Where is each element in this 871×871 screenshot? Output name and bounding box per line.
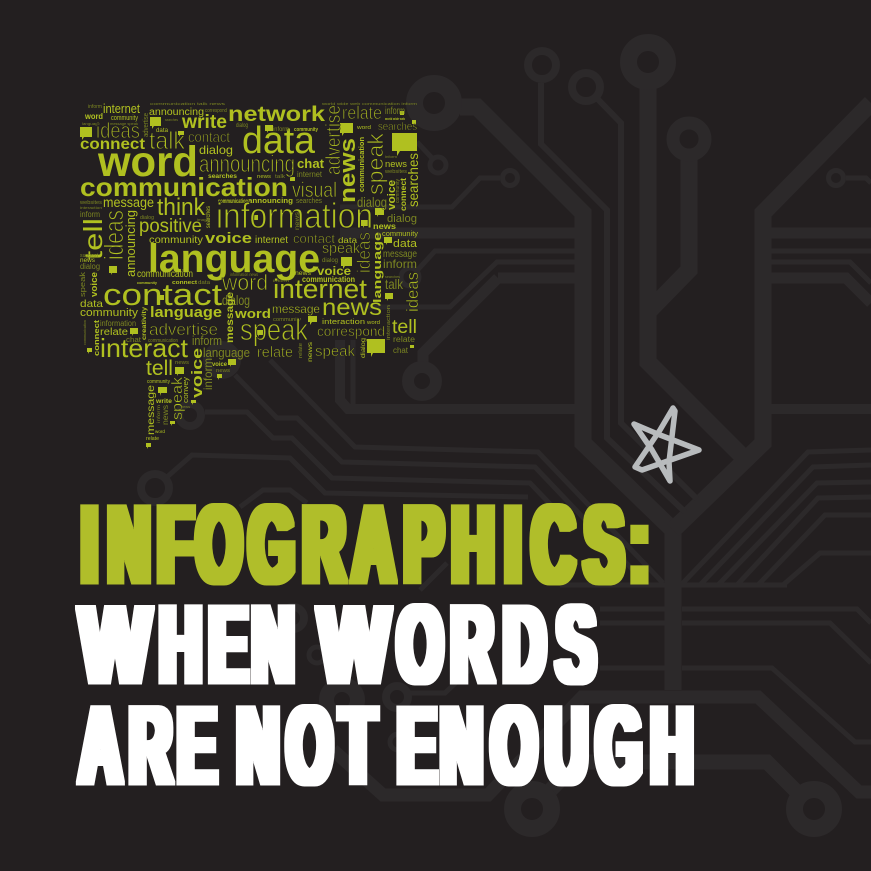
- speech-bubble word cloud: news: [322, 294, 382, 320]
- title line 1: Infographics: INFOGRAPHICS:: [81, 483, 649, 606]
- speech-bubble word cloud: inform: [383, 257, 417, 271]
- speech-bubble word cloud: news: [181, 404, 190, 409]
- speech-bubble word cloud: searches: [385, 274, 400, 279]
- speech-bubble word cloud: voice: [189, 348, 206, 398]
- speech-bubble word cloud: contact: [293, 231, 335, 246]
- speech-bubble word cloud: dialog: [80, 262, 100, 271]
- speech-bubble word cloud: write: [181, 112, 227, 133]
- speech-bubble word cloud: inform: [192, 333, 222, 348]
- speech-bubble word cloud: image: [197, 217, 210, 222]
- speech-bubble word cloud: dialog: [140, 215, 154, 221]
- speech-bubble word cloud: news: [175, 360, 190, 366]
- speech-bubble word cloud: news: [257, 174, 272, 180]
- speech-bubble word cloud: information: [100, 319, 136, 328]
- speech-bubble word cloud: community: [80, 307, 139, 319]
- speech-bubble word cloud: message: [272, 302, 320, 316]
- title line 3: Are not enough: ARE NOT ENOUGH: [79, 683, 693, 807]
- speech-bubble word cloud: dialog: [322, 258, 338, 264]
- speech-bubble word cloud: chat: [393, 346, 409, 355]
- speech-bubble word cloud: speak: [322, 240, 360, 257]
- speech-bubble word cloud: community: [294, 127, 318, 133]
- speech-bubble word cloud: announcing: [199, 151, 295, 178]
- speech-bubble word cloud: creativity: [141, 307, 148, 340]
- speech-bubble word cloud: language: [203, 345, 250, 360]
- speech-bubble word cloud: community: [395, 179, 401, 203]
- speech-bubble word cloud: communication: [357, 137, 366, 192]
- speech-bubble word cloud: voice: [386, 180, 398, 210]
- speech-bubble word cloud: inform: [273, 127, 289, 133]
- speech-bubble word cloud: visual: [292, 179, 337, 202]
- speech-bubble word cloud: connect: [172, 280, 197, 286]
- speech-bubble word cloud: inform: [273, 278, 290, 283]
- speech-bubble word cloud: advertise: [323, 105, 345, 175]
- speech-bubble word cloud: message: [383, 249, 417, 260]
- speech-bubble word cloud: relate: [100, 327, 128, 338]
- speech-bubble word cloud: news: [335, 138, 360, 203]
- speech-bubble word cloud: announcing: [149, 107, 204, 118]
- speech-bubble word cloud: announcing: [123, 210, 138, 277]
- lower rows of the cloud: word: [221, 270, 268, 295]
- speech-bubble word cloud: advertise: [149, 320, 218, 339]
- speech-bubble word cloud: internet: [297, 170, 323, 179]
- speech-bubble word cloud: connect: [399, 178, 408, 211]
- speech-bubble word cloud: contact: [103, 277, 222, 312]
- speech-bubble word cloud: inform: [80, 210, 100, 219]
- speech-bubble word cloud: word: [84, 112, 103, 121]
- speech-bubble word cloud: ideas: [96, 118, 140, 143]
- speech-bubble word cloud: tell: [392, 317, 417, 338]
- speech-bubble word cloud: internet: [273, 274, 368, 304]
- speech-bubble word cloud: correspond: [205, 108, 227, 114]
- speech-bubble word cloud: word: [234, 306, 271, 321]
- speech-bubble word cloud: communication: [302, 275, 355, 284]
- speech-bubble word cloud: interaction: [322, 319, 365, 326]
- circuit board traces: [141, 42, 871, 828]
- speech-bubble word cloud: dialog: [357, 194, 387, 210]
- speech-bubble word cloud: dialog: [199, 143, 233, 157]
- speech-bubble word cloud: communication: [137, 269, 193, 280]
- speech-bubble word cloud: chat: [126, 337, 141, 344]
- speech-bubble word cloud: word: [366, 320, 380, 326]
- speech-bubble word cloud: network: [228, 103, 325, 126]
- speech-bubble word cloud: language: [148, 237, 320, 281]
- speech-bubble word cloud: convey: [183, 376, 190, 403]
- speech-bubble word cloud: dialog: [236, 123, 248, 129]
- speech-bubble word cloud: dialog: [361, 338, 367, 358]
- speech-bubble word cloud: community: [382, 231, 419, 238]
- speech-bubble word cloud: speak: [80, 271, 87, 297]
- title line 2: When words: W: [80, 583, 150, 706]
- speech-bubble word cloud: searches: [165, 117, 178, 122]
- speech-bubble word cloud: communication: [148, 338, 178, 344]
- speech-bubble word cloud: speak: [240, 312, 308, 347]
- speech-bubble word cloud: ideas: [354, 232, 374, 273]
- speech-bubble word cloud: inform: [201, 358, 215, 390]
- speech-bubble word cloud: inform: [88, 104, 102, 110]
- speech-bubble word cloud: inform: [156, 405, 161, 423]
- title line 2: When words: HEN: [159, 583, 294, 706]
- speech-bubble word cloud: message: [146, 384, 157, 435]
- speech-bubble word cloud: speak: [363, 132, 388, 195]
- speech-bubble word cloud: searches: [296, 198, 322, 205]
- title line 2: When words: ORDS: [397, 583, 595, 706]
- small speech bubble icons: [80, 111, 417, 449]
- speech-bubble word cloud: message speak: [110, 121, 138, 126]
- speech-bubble word cloud: advertise: [143, 113, 150, 137]
- speech-bubble word cloud: interaction: [386, 305, 392, 340]
- speech-bubble word cloud: news: [373, 222, 397, 231]
- speech-bubble word cloud: talk: [149, 127, 185, 155]
- speech-bubble word cloud: data: [242, 120, 316, 162]
- speech-bubble word cloud: [78, 101, 422, 449]
- speech-bubble word cloud: data: [338, 236, 358, 245]
- speech-bubble word cloud: communication: [80, 172, 288, 202]
- speech-bubble word cloud: communication: [82, 320, 87, 345]
- speech-bubble word cloud: language: [372, 232, 384, 303]
- speech-bubble word cloud: correspond: [317, 323, 385, 339]
- speech-bubble word cloud: data: [80, 298, 103, 310]
- speech-bubble word cloud: news: [161, 405, 170, 425]
- speech-bubble word cloud: talk: [275, 174, 286, 180]
- speech-bubble word cloud: news: [385, 159, 408, 169]
- speech-bubble word cloud: relate: [257, 344, 293, 361]
- title line 2: When words: [80, 583, 595, 706]
- speech-bubble word cloud: language: [150, 305, 222, 321]
- title line 2: When words: W: [319, 583, 389, 706]
- speech-bubble word cloud: ideas: [99, 210, 129, 260]
- speech-bubble word cloud: data: [393, 238, 418, 250]
- speech-bubble word cloud: relate: [393, 335, 416, 344]
- speech-bubble word cloud: voice: [89, 272, 99, 297]
- speech-bubble word cloud: language: [82, 121, 101, 126]
- top rows of the cloud: communication talk news: [150, 101, 225, 106]
- speech-bubble word cloud: dialog: [387, 213, 417, 225]
- speech-bubble word cloud: speak: [169, 376, 186, 420]
- speech-bubble word cloud: community: [147, 379, 170, 385]
- speech-bubble word cloud: community: [137, 280, 158, 285]
- speech-bubble word cloud: searches: [378, 121, 417, 133]
- speech-bubble word cloud: internet: [103, 101, 140, 116]
- speech-bubble word cloud: voice: [205, 230, 252, 247]
- speech-bubble word cloud: interact: [100, 333, 189, 363]
- speech-bubble word cloud: relate: [146, 436, 159, 442]
- speech-bubble word cloud: news: [295, 212, 301, 230]
- speech-bubble word cloud: news: [307, 341, 314, 362]
- speech-bubble word cloud: community: [149, 234, 204, 246]
- icon: hand-drawn star: [634, 408, 699, 481]
- speech-bubble word cloud: community: [273, 317, 301, 323]
- speech-bubble word cloud: relate: [342, 103, 382, 123]
- speech-bubble word cloud: talk: [385, 276, 404, 292]
- speech-bubble word cloud: voice: [212, 362, 228, 368]
- speech-bubble word cloud: searches: [205, 205, 212, 228]
- speech-bubble word cloud: announcing: [248, 198, 293, 205]
- speech-bubble word cloud: interaction: [80, 205, 102, 210]
- speech-bubble word cloud: searches: [208, 174, 238, 180]
- speech-bubble word cloud: voice: [317, 264, 351, 278]
- speech-bubble word cloud: word: [155, 429, 165, 434]
- speech-bubble word cloud: word: [97, 138, 198, 186]
- speech-bubble word cloud: inform: [385, 154, 398, 159]
- speech-bubble word cloud: data: [198, 280, 210, 286]
- speech-bubble word cloud: information: [216, 195, 373, 236]
- middle rows of the cloud: message: [103, 195, 154, 210]
- speech-bubble word cloud: searches: [405, 153, 421, 207]
- speech-bubble word cloud: internet: [255, 235, 288, 246]
- speech-bubble word cloud: message: [225, 291, 236, 343]
- speech-bubble word cloud: word: [357, 125, 371, 131]
- speech-bubble word cloud: information news: [230, 272, 259, 277]
- speech-bubble word cloud: communication: [218, 199, 248, 205]
- speech-bubble word cloud: connect: [92, 319, 101, 356]
- speech-bubble word cloud: speak: [315, 343, 355, 360]
- speech-bubble word cloud: news: [80, 258, 95, 264]
- speech-bubble word cloud: websites: [80, 200, 103, 206]
- speech-bubble word cloud: world wide web: [384, 116, 405, 121]
- speech-bubble word cloud: think: [157, 194, 206, 221]
- speech-bubble word cloud: news: [295, 271, 311, 277]
- speech-bubble word cloud: ideas: [403, 272, 422, 312]
- speech bubble tail: tell: [146, 357, 173, 380]
- speech-bubble word cloud: data: [156, 128, 169, 134]
- speech-bubble word cloud: suggest: [80, 253, 99, 259]
- speech-bubble word cloud: chat: [297, 156, 325, 171]
- speech-bubble word cloud: websites: [385, 169, 408, 175]
- speech-bubble word cloud: news: [216, 368, 230, 374]
- speech-bubble word cloud: tell: [78, 218, 108, 260]
- speech-bubble word cloud: inform: [385, 106, 405, 117]
- speech-bubble word cloud: contact: [188, 129, 231, 146]
- speech-bubble word cloud: positive: [139, 216, 202, 237]
- speech-bubble word cloud: community: [111, 115, 138, 122]
- speech-bubble word cloud: write: [155, 399, 173, 405]
- speech-bubble word cloud: dialog: [222, 292, 250, 308]
- speech-bubble word cloud: relate: [298, 343, 304, 358]
- speech-bubble word cloud: world wide web communication inform: [322, 101, 418, 106]
- speech-bubble word cloud: connect: [80, 136, 145, 153]
